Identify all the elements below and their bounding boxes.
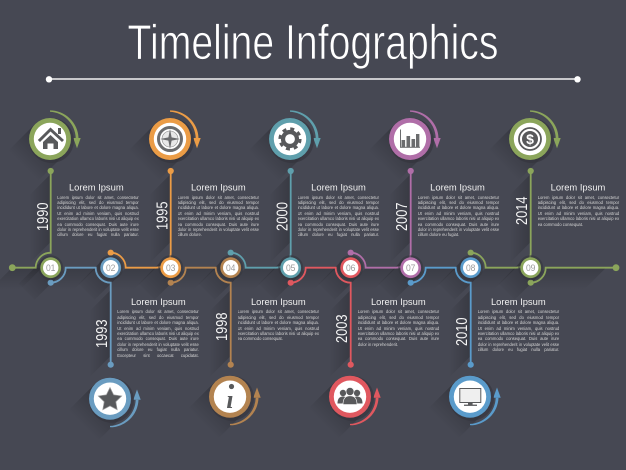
text block: Lorem ipsum dolor sit amet, consectetur — [298, 195, 379, 200]
icon: bar chart — [400, 130, 420, 148]
badge: red ring — [329, 376, 374, 421]
connector: teal to 2000 — [228, 168, 294, 268]
arrow: green clockwise — [50, 110, 81, 148]
text block — [358, 309, 440, 349]
text block: ea commodo consequat. Duis aute irure — [298, 222, 379, 227]
milestone 1990 — [29, 110, 139, 241]
milestone 1998 — [209, 296, 320, 425]
connector: green to 2014 — [468, 168, 534, 268]
node 02 — [98, 255, 123, 280]
connector: green end line — [528, 264, 619, 286]
arrow: purple clockwise — [410, 110, 441, 148]
text block: exercitation ullamco laboris nisi ut aliquip ex — [117, 331, 199, 336]
connector: green start line to 1990 — [9, 168, 54, 271]
icon: house — [38, 128, 64, 149]
node 06 — [338, 255, 363, 280]
badge: teal ring — [269, 118, 314, 163]
arrow: blue counter-clockwise — [110, 390, 141, 427]
year 2003: 2003 — [334, 314, 351, 343]
text block: Ut enim ad minim veniam, quis nostrud — [117, 326, 199, 331]
text block: ea commodo consequat. Duis aute irure — [117, 336, 199, 341]
year 2007: 2007 — [394, 202, 411, 231]
text block: ea commodo consequat. — [538, 222, 583, 227]
text block: exercitation ullamco laboris nisi ut aliquip ex — [538, 216, 619, 221]
text block: Lorem ipsum dolor sit amet, consectetur — [178, 195, 259, 200]
icon: star — [98, 388, 122, 410]
text block: cillum dolore eu fugiat. — [418, 232, 459, 237]
text block: exercitation ullamco laboris nisi ut aliquip ex — [358, 331, 439, 336]
milestone 2007 — [389, 110, 500, 241]
text block — [238, 309, 320, 344]
node 04: 04 — [226, 263, 235, 274]
text block: incididunt ut labore et dolore magna aliqua. — [418, 205, 499, 210]
icon: people — [338, 388, 362, 404]
milestone 1995 — [149, 110, 260, 241]
icon: compass — [158, 128, 182, 150]
heading: Lorem Ipsum — [551, 182, 606, 192]
connector: blue to 2010 — [408, 268, 474, 368]
arrow: teal clockwise — [290, 110, 321, 148]
node 03: 03 — [166, 263, 175, 274]
text block: cillum dolore eu fugiat nulla pariatur. — [57, 232, 139, 237]
icon: monitor — [460, 388, 481, 406]
text block: adipiscing elit, sed do eiusmod tempor — [478, 315, 559, 320]
node 07 — [398, 255, 423, 280]
node 04 — [218, 255, 243, 280]
text block — [117, 309, 199, 359]
text block: Ut enim ad minim veniam, quis nostrud — [238, 326, 319, 331]
node 09: 09 — [526, 263, 535, 274]
node 05 — [278, 255, 303, 280]
text block: Ut enim ad minim veniam, quis nostrud — [358, 326, 439, 331]
text block: incididunt ut labore et dolore magna aliqua. — [538, 205, 619, 210]
heading: Lorem Ipsum — [131, 296, 186, 307]
text block: adipiscing elit, sed do eiusmod tempor — [418, 200, 499, 205]
text block: dolor in reprehenderit. — [358, 342, 398, 347]
year 1990: 1990 — [35, 202, 52, 231]
text block: ea commodo consequat. Duis aute irure — [478, 336, 559, 341]
text block: incididunt ut labore et dolore magna aliqua. — [298, 205, 379, 210]
text block: Lorem ipsum dolor sit amet, consectetur — [238, 309, 319, 314]
icon: info: ı — [226, 385, 234, 414]
text block: Lorem ipsum dolor sit amet, consectetur — [117, 309, 199, 314]
text block: cillum dolore eu fugiat nulla pariatur. — [117, 347, 199, 352]
text block: Ut enim ad minim veniam, quis nostrud — [57, 211, 139, 216]
milestone 2014 — [509, 110, 620, 230]
text block: exercitation ullamco laboris nisi ut aliquip ex — [178, 216, 259, 221]
milestone 1993 — [89, 296, 199, 427]
text block — [538, 195, 620, 230]
milestone 2003 — [329, 296, 440, 425]
text block — [57, 195, 139, 241]
text block: adipiscing elit, sed do eiusmod tempor — [57, 200, 139, 205]
badge: purple ring — [389, 118, 434, 163]
text block: adipiscing elit, sed do eiusmod tempor — [238, 315, 319, 320]
heading: Lorem Ipsum — [69, 182, 124, 192]
node 02: 02 — [106, 263, 115, 274]
heading: Lorem Ipsum — [251, 296, 306, 307]
text block: exercitation ullamco laboris nisi ut aliquip ex — [418, 216, 499, 221]
badge: blue ring — [89, 378, 134, 423]
text block: dolor in reprehenderit in voluptate velit esse — [418, 227, 499, 232]
text block: dolor in reprehenderit in voluptate velit esse — [178, 227, 259, 232]
text block: dolor in reprehenderit in voluptate velit esse — [57, 227, 139, 232]
heading: Lorem Ipsum — [430, 182, 485, 192]
year 1995: 1995 — [154, 201, 172, 230]
milestone 2000 — [269, 110, 380, 241]
badge: green ring — [509, 118, 554, 163]
badge: brown ring — [209, 376, 254, 421]
text block — [478, 309, 560, 355]
text block — [418, 195, 500, 241]
badge: orange ring — [149, 118, 194, 163]
text block: exercitation ullamco laboris nisi ut aliquip ex — [298, 216, 379, 221]
text block: Ut enim ad minim veniam, quis nostrud — [298, 211, 379, 216]
text block: incididunt ut labore et dolore magna aliqua. — [238, 320, 319, 325]
arrow: orange clockwise — [170, 110, 201, 148]
connector: orange to 1995 — [108, 168, 174, 268]
text block: exercitation ullamco laboris nisi ut aliquip ex — [57, 216, 139, 221]
icon: dollar coin: $ — [526, 131, 534, 147]
text block: adipiscing elit, sed do eiusmod tempor — [358, 315, 439, 320]
text block: adipiscing elit, sed do eiusmod tempor — [298, 200, 379, 205]
text block: Lorem ipsum dolor sit amet, consectetur — [418, 195, 499, 200]
node 01: 01 — [46, 263, 55, 274]
text block: ea commodo consequat. Duis aute irure — [57, 222, 139, 227]
arrow: green clockwise — [530, 110, 561, 148]
text block: ea commodo consequat. — [238, 336, 283, 341]
connector: purple to 2007 — [348, 168, 414, 268]
text block: exercitation ullamco laboris nisi ut aliquip ex — [478, 331, 559, 336]
text block: cillum dolore eu fugiat nulla pariatur. — [478, 347, 559, 352]
node 06: 06 — [346, 263, 355, 274]
text block: Ut enim ad minim veniam, quis nostrud — [418, 211, 499, 216]
text block: Lorem ipsum dolor sit amet, consectetur — [358, 309, 439, 314]
heading: Lorem Ipsum — [191, 182, 246, 192]
text block: Lorem ipsum dolor sit amet, consectetur — [538, 195, 619, 200]
text block: incididunt ut labore et dolore magna aliqua. — [358, 320, 439, 325]
milestone 2010 — [449, 296, 560, 425]
heading: Lorem Ipsum — [311, 182, 366, 192]
arrow: brown counter-clockwise — [230, 388, 261, 425]
text block — [178, 195, 260, 241]
text block: Ut enim ad minim veniam, quis nostrud — [178, 211, 259, 216]
node 03 — [158, 255, 183, 280]
text block: exercitation ullamco laboris nisi ut aliquip ex — [238, 331, 319, 336]
text block: Excepteur sint occaecat cupidatat. — [117, 353, 199, 358]
badge: blue ring — [449, 376, 494, 421]
node 01 — [38, 255, 63, 280]
heading: Lorem Ipsum — [371, 296, 426, 307]
text block: dolor in reprehenderit in voluptate velit esse — [298, 227, 379, 232]
text block: ea commodo consequat. Duis aute irure — [178, 222, 259, 227]
text block: adipiscing elit, sed do eiusmod tempor — [178, 200, 259, 205]
node 08 — [458, 255, 483, 280]
node 07: 07 — [406, 263, 415, 274]
text block: incididunt ut labore et dolore magna aliqua. — [178, 205, 259, 210]
year 2000: 2000 — [274, 202, 292, 231]
text block: cillum dolore eu fugiat nulla pariatur. — [298, 232, 379, 237]
text block: adipiscing elit, sed do eiusmod tempor — [117, 315, 199, 320]
text block — [298, 195, 380, 241]
text block: cillum dolore. — [178, 232, 202, 237]
icon: gear — [280, 129, 300, 149]
node 09 — [518, 255, 543, 280]
year 2014: 2014 — [514, 196, 531, 225]
node 08: 08 — [466, 263, 475, 274]
arrow: blue counter-clockwise — [470, 388, 501, 425]
title: Timeline Infographics — [128, 15, 498, 70]
text block: Ut enim ad minim veniam, quis nostrud — [478, 326, 559, 331]
year 2010: 2010 — [454, 317, 471, 346]
text block: incididunt ut labore et dolore magna aliqua. — [57, 205, 139, 210]
connector: blue to 1993 — [48, 268, 114, 368]
text block: Ut enim ad minim veniam, quis nostrud — [538, 211, 619, 216]
text block: adipiscing elit, sed do eiusmod tempor — [538, 200, 619, 205]
node 05: 05 — [286, 263, 295, 274]
heading: Lorem Ipsum — [491, 296, 546, 307]
year 1998: 1998 — [214, 312, 231, 341]
badge: green ring — [29, 118, 74, 163]
text block: Lorem ipsum dolor sit amet, consectetur — [478, 309, 559, 314]
text block: dolor in reprehenderit in voluptate velit esse — [478, 342, 559, 347]
arrow: red counter-clockwise — [350, 388, 381, 425]
text block: incididunt ut labore et dolore magna aliqua. — [117, 320, 199, 325]
text block: dolor in reprehenderit in voluptate velit esse — [117, 342, 199, 347]
title rule — [46, 76, 581, 83]
text block: ea commodo consequat. Duis aute irure — [358, 336, 439, 341]
connector: brown to 1998 — [168, 268, 234, 368]
text block: Lorem ipsum dolor sit amet, consectetur — [57, 195, 139, 200]
text block: ea commodo consequat. Duis aute irure — [418, 222, 499, 227]
text block: incididunt ut labore et dolore magna aliqua. — [478, 320, 559, 325]
connector: red to 2003 — [288, 268, 354, 368]
year 1993: 1993 — [94, 319, 111, 348]
